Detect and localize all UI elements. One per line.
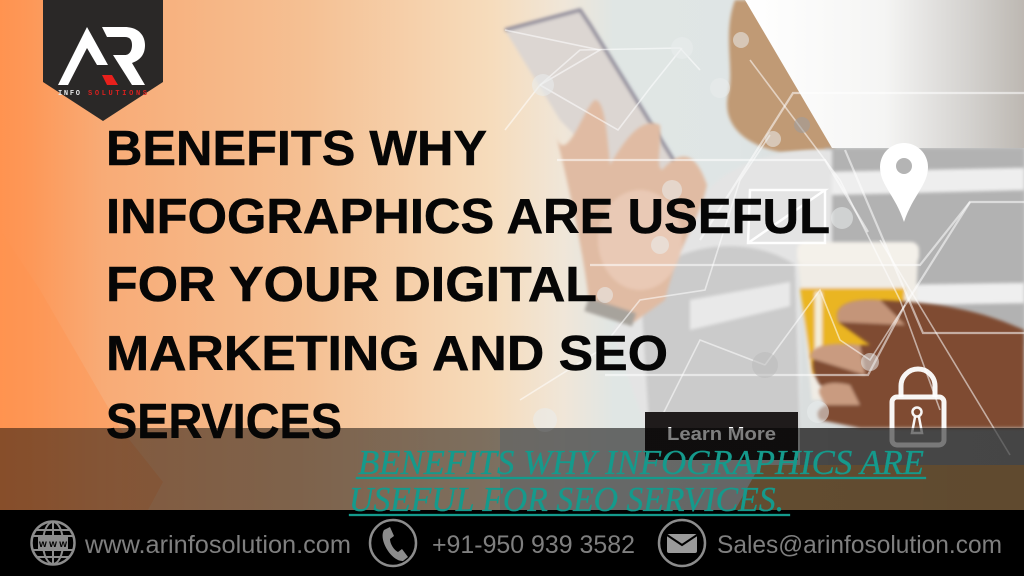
icon: location pin — [880, 143, 928, 222]
photo: hand holding phone — [556, 100, 707, 326]
contact: website — [32, 522, 351, 564]
photo: hand holding cup — [810, 300, 1024, 428]
photo: phone — [505, 10, 695, 195]
orange side chevron — [0, 230, 163, 510]
photo: dark lower background — [800, 428, 1024, 465]
contact: phone — [370, 520, 635, 566]
logo wordmark: INFO — [58, 90, 80, 98]
contact: website: www.arinfosolution.com — [84, 531, 351, 559]
footer bar — [0, 510, 1024, 576]
title: INFOGRAPHICS ARE USEFUL — [106, 190, 830, 244]
contact: phone: +91-950 939 3582 — [432, 531, 635, 559]
logo red accent — [102, 75, 118, 85]
icon: envelope — [659, 520, 705, 566]
photo: sweater — [612, 148, 1024, 440]
title — [106, 122, 830, 449]
icon: padlock — [892, 369, 944, 445]
title: MARKETING AND SEO — [106, 327, 668, 381]
button: learn more: Learn More — [667, 424, 776, 444]
logo letter R — [102, 27, 145, 85]
link headline: USEFUL FOR SEO SERVICES. — [349, 480, 784, 519]
contact: email: Sales@arinfosolution.com — [717, 531, 1002, 559]
network overlay nodes — [532, 32, 879, 432]
contact: email — [659, 520, 1002, 566]
network overlay box around text — [748, 190, 825, 243]
link headline: BENEFITS WHY INFOGRAPHICS ARE — [358, 443, 924, 482]
logo badge — [43, 0, 163, 121]
icon: globe: www — [38, 539, 67, 550]
photo: coffee cup — [797, 242, 919, 400]
logo letter A — [58, 27, 108, 85]
title: BENEFITS WHY — [106, 122, 487, 176]
title: FOR YOUR DIGITAL — [106, 258, 597, 312]
translucent dark band — [0, 428, 1024, 510]
photo: person holding phone and cup — [500, 0, 1024, 510]
icon: telephone — [370, 520, 416, 566]
link headline — [349, 443, 926, 519]
title: SERVICES — [106, 395, 342, 449]
icon: globe — [32, 522, 74, 564]
logo badge: SOLUTIONS — [88, 90, 147, 98]
white hexagon panel — [745, 0, 1024, 148]
network overlay lines — [505, 30, 1024, 455]
button: learn more — [645, 412, 798, 460]
photo: hair — [727, 0, 835, 152]
